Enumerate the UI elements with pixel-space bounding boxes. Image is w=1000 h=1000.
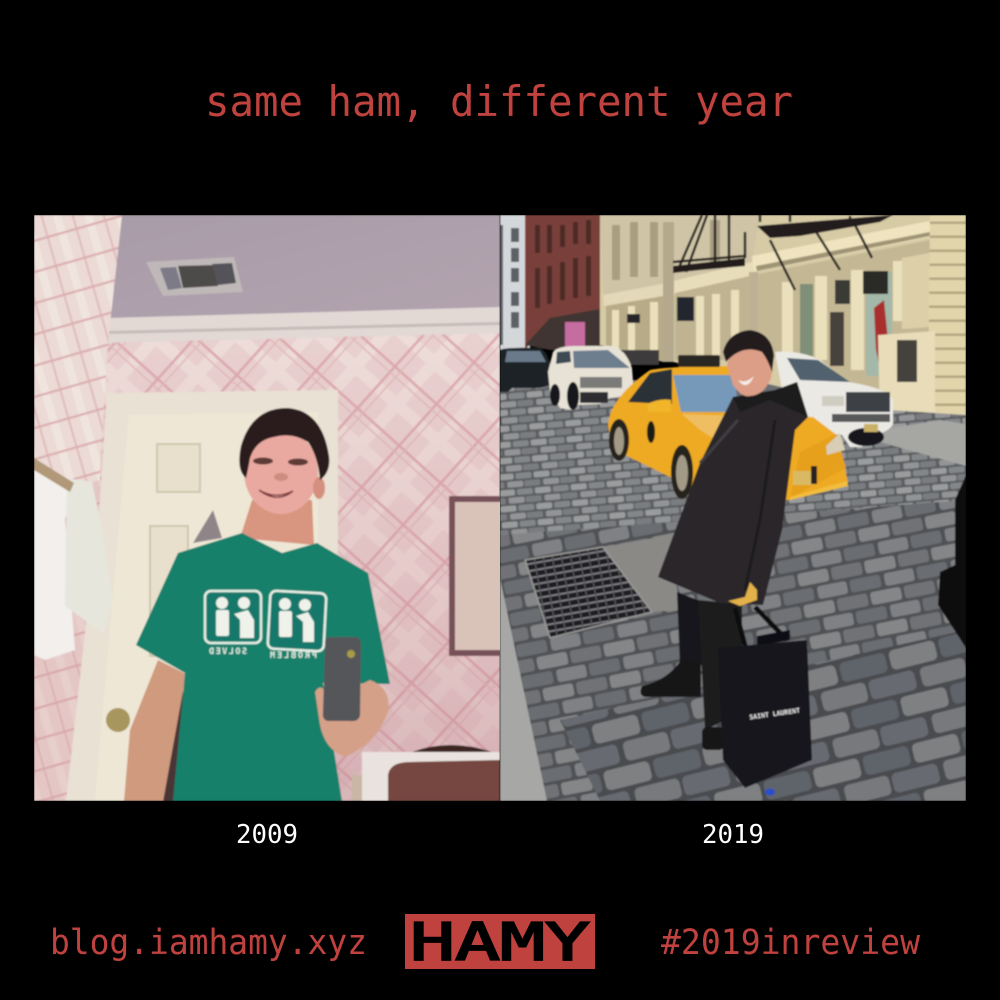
dark clothes behind	[412, 745, 492, 752]
street mid	[500, 500, 966, 801]
logo: HAMY	[405, 913, 595, 973]
far white building	[500, 215, 530, 355]
kiosk	[878, 331, 935, 421]
sidewalk right	[868, 420, 966, 466]
rusticated pier	[928, 215, 966, 425]
neck	[240, 500, 314, 545]
towels on rack	[34, 458, 113, 660]
shopping bag	[718, 607, 812, 788]
brick building	[525, 215, 605, 350]
caption: 2009: 2009	[236, 820, 298, 850]
ceiling	[110, 215, 500, 320]
blue litter	[765, 788, 775, 796]
dark sedan	[500, 348, 550, 392]
t-shirt	[136, 533, 390, 801]
hand holding phone	[315, 680, 389, 757]
crown molding	[106, 307, 500, 343]
back wall	[98, 216, 500, 801]
cream cast-iron building	[600, 215, 966, 430]
shopping bag: SAINT LAURENT	[749, 707, 801, 722]
white SUV left	[548, 346, 634, 410]
white SUV right	[775, 352, 893, 447]
street base	[541, 379, 782, 398]
footer: hashtag: #2019inreview	[661, 923, 921, 963]
left arm	[124, 660, 186, 801]
street far	[500, 386, 966, 535]
parked car at right edge	[938, 475, 966, 648]
curb	[500, 578, 547, 801]
door frame	[66, 390, 338, 801]
shirt graphic: problem/solved: PROBLEM	[270, 651, 317, 661]
street near	[560, 630, 966, 801]
concrete sidewalk	[603, 535, 680, 612]
left wall	[34, 215, 122, 801]
door	[95, 412, 318, 801]
yellow glove	[728, 582, 757, 606]
footer: blog url: blog.iamhamy.xyz	[50, 923, 367, 963]
yellow taxi	[608, 355, 848, 500]
trousers and boots	[641, 592, 742, 750]
hanging cloth	[193, 510, 222, 543]
caption: 2019: 2019	[702, 820, 764, 850]
photo: 2009 bathroom selfie	[34, 215, 509, 801]
logo: HAMY: HAMY	[410, 913, 590, 973]
fire escapes	[673, 215, 893, 290]
phone	[323, 637, 361, 721]
framed picture	[448, 495, 500, 657]
bed and pillow	[352, 752, 500, 801]
sidewalk grate	[525, 547, 652, 638]
title: same ham, different year	[205, 77, 793, 126]
head and hair	[723, 330, 774, 396]
pier	[663, 222, 674, 362]
shop windows	[800, 284, 813, 356]
head	[239, 408, 329, 514]
ceiling vent	[146, 257, 243, 296]
dark fabric behind arm	[162, 691, 184, 801]
hanging signs	[627, 297, 694, 323]
shirt graphic: problem/solved: SOLVED	[209, 647, 247, 657]
shirt graphic: problem/solved	[205, 591, 326, 661]
pedestrians	[623, 350, 659, 365]
door knob	[106, 708, 130, 732]
black jacket	[658, 382, 808, 605]
columns	[612, 261, 905, 370]
recessed bays	[606, 296, 663, 362]
photo: 2019 New York street	[500, 215, 966, 801]
door panels	[150, 444, 200, 656]
